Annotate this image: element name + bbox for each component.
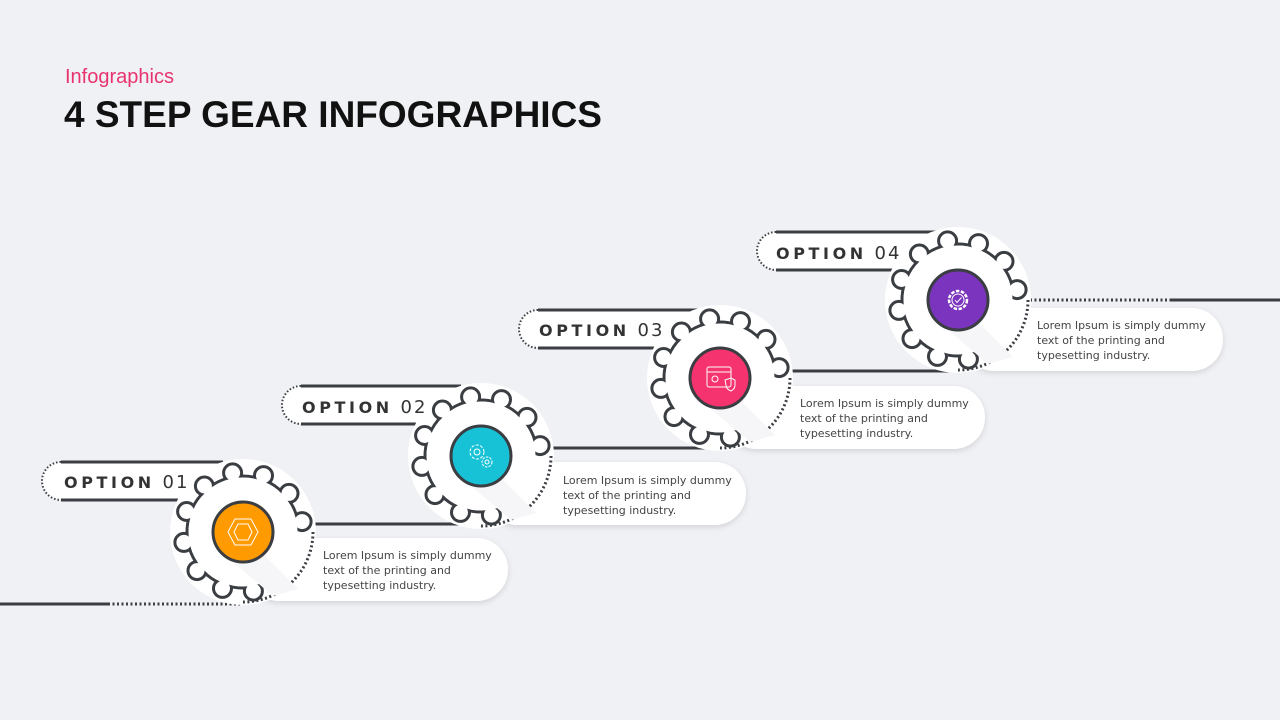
gear 3 <box>647 305 793 451</box>
text box 3: text of the printing and <box>800 412 928 425</box>
icon 1: hexagon <box>213 502 273 562</box>
label pill 2 <box>282 386 461 424</box>
label text 2: OPTION 02 <box>302 397 427 418</box>
connector line 1 <box>303 522 478 526</box>
step 4 <box>757 227 1223 373</box>
connector line 3 <box>780 370 955 372</box>
connector line 2 <box>541 446 716 450</box>
text box 3: typesetting industry. <box>800 427 913 440</box>
step 2 <box>282 383 746 529</box>
text box 4 <box>963 308 1223 371</box>
text box 2: typesetting industry. <box>563 504 676 517</box>
label text 4: OPTION 04 <box>776 243 901 264</box>
label pill 1 <box>42 462 223 500</box>
text box 2: Lorem Ipsum is simply dummy <box>563 474 732 487</box>
text box 4: Lorem Ipsum is simply dummy <box>1037 319 1206 332</box>
text box 4: typesetting industry. <box>1037 349 1150 362</box>
subtitle: Infographics <box>65 66 174 88</box>
gear 1 <box>170 459 316 605</box>
text box 3 <box>725 386 985 449</box>
text box 3: Lorem Ipsum is simply dummy <box>800 397 969 410</box>
title: 4 STEP GEAR INFOGRAPHICS <box>64 94 602 135</box>
text box 2: text of the printing and <box>563 489 691 502</box>
gear 4 <box>885 227 1031 373</box>
icon 2: cogs <box>451 426 511 486</box>
text box 1: text of the printing and <box>323 564 451 577</box>
step 3 <box>519 305 985 451</box>
label text 1: OPTION 01 <box>64 472 189 493</box>
text box 1: Lorem Ipsum is simply dummy <box>323 549 492 562</box>
text box 4: text of the printing and <box>1037 334 1165 347</box>
bottom left connector line <box>0 602 240 606</box>
gear 2 <box>408 383 554 529</box>
label text 3: OPTION 03 <box>539 320 664 341</box>
label pill 4 <box>757 232 938 270</box>
text box 2 <box>486 462 746 525</box>
top right connector line <box>1030 298 1280 302</box>
icon 3: browser shield <box>690 348 750 408</box>
label pill 3 <box>519 310 700 348</box>
step 1 <box>42 459 508 605</box>
text box 1: typesetting industry. <box>323 579 436 592</box>
icon 4: gear check <box>928 270 988 330</box>
text box 1 <box>248 538 508 601</box>
